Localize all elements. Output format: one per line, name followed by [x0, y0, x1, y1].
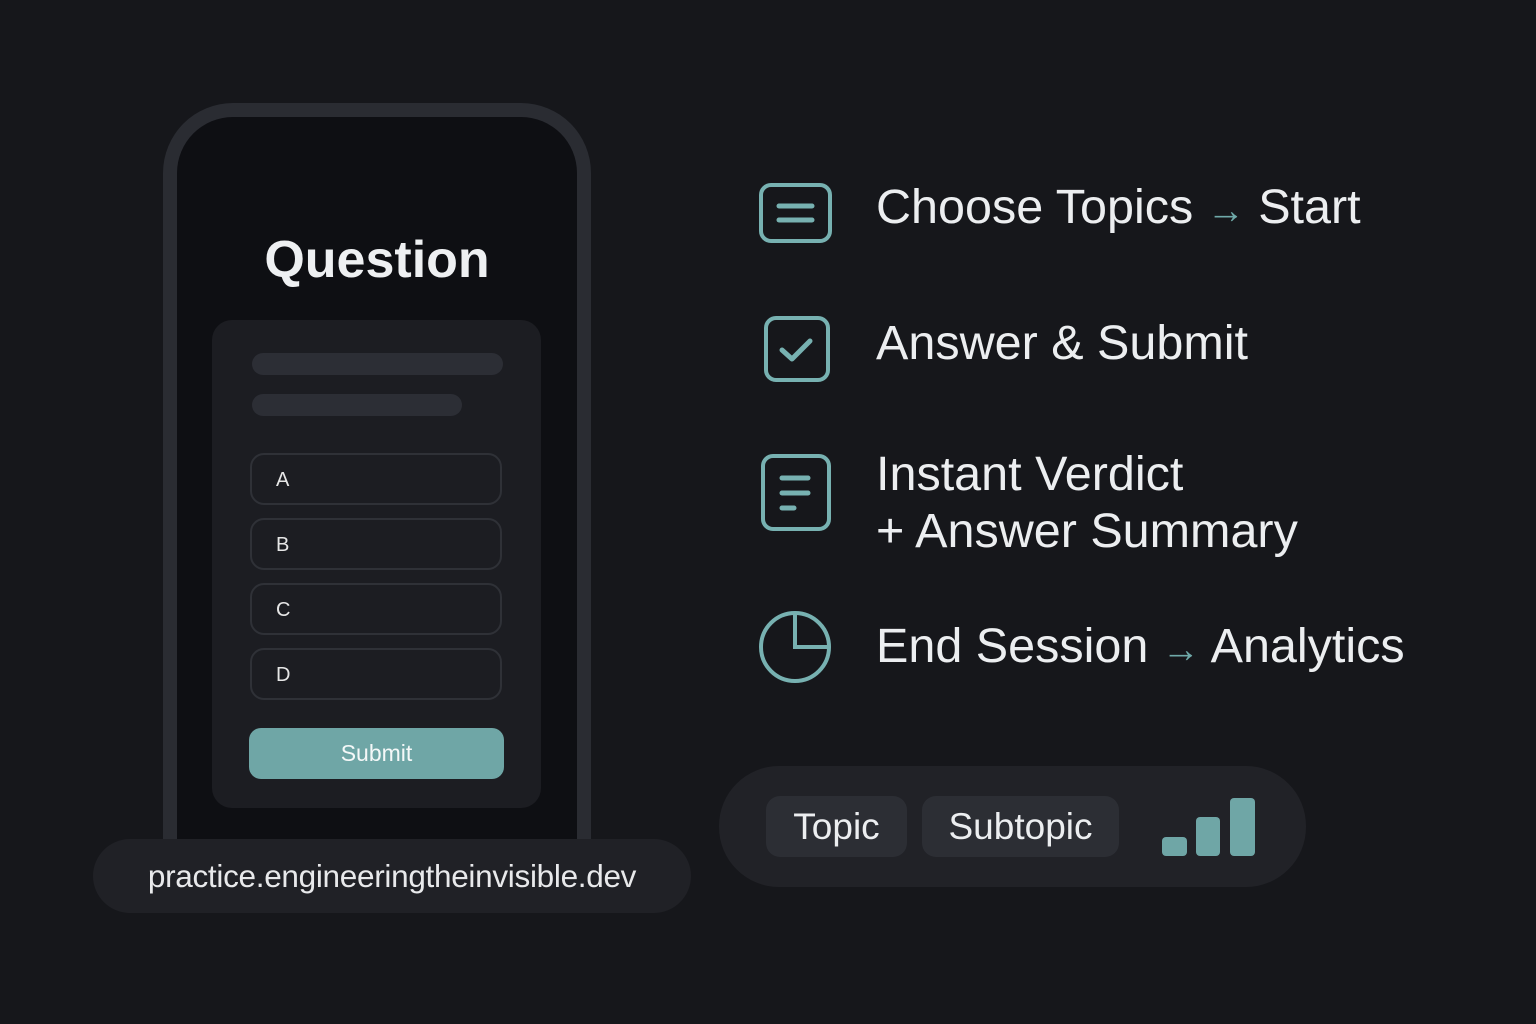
step: choose topics: Choose Topics → Start: [876, 180, 1361, 234]
option B: B: [276, 534, 289, 556]
heading: Question: Question: [264, 231, 490, 289]
icon: bar chart: [1162, 798, 1255, 856]
icon: checkbox: [764, 316, 830, 382]
step: instant verdict: Instant Verdict: [876, 447, 1183, 501]
icon: pie: [759, 611, 831, 683]
chip: subtopic: Subtopic: [948, 806, 1092, 847]
step: instant verdict: + Answer Summary: [876, 504, 1298, 558]
option D: [250, 648, 502, 700]
step: instant verdict: [876, 447, 1298, 558]
chip: subtopic: [922, 796, 1119, 857]
placeholder bar 1: [252, 353, 503, 375]
icon: document: [761, 454, 831, 531]
chip: topic: Topic: [793, 806, 880, 847]
option C: [250, 583, 502, 635]
submit button: Submit: [341, 740, 412, 766]
submit button: [249, 728, 504, 779]
url pill: [93, 839, 691, 913]
filter pill: [719, 766, 1306, 887]
question card: [212, 320, 541, 808]
option B: [250, 518, 502, 570]
option A: [250, 453, 502, 505]
phone: [163, 103, 591, 877]
option D: D: [276, 664, 290, 686]
chip: topic: [766, 796, 907, 857]
option C: C: [276, 599, 290, 621]
url pill: practice.engineeringtheinvisible.dev: [148, 858, 636, 894]
option A: A: [276, 469, 289, 491]
icon: list: [759, 183, 832, 243]
step: end session: End Session → Analytics: [876, 619, 1405, 673]
placeholder bar 2: [252, 394, 462, 416]
step: answer & submit: Answer & Submit: [876, 316, 1248, 370]
